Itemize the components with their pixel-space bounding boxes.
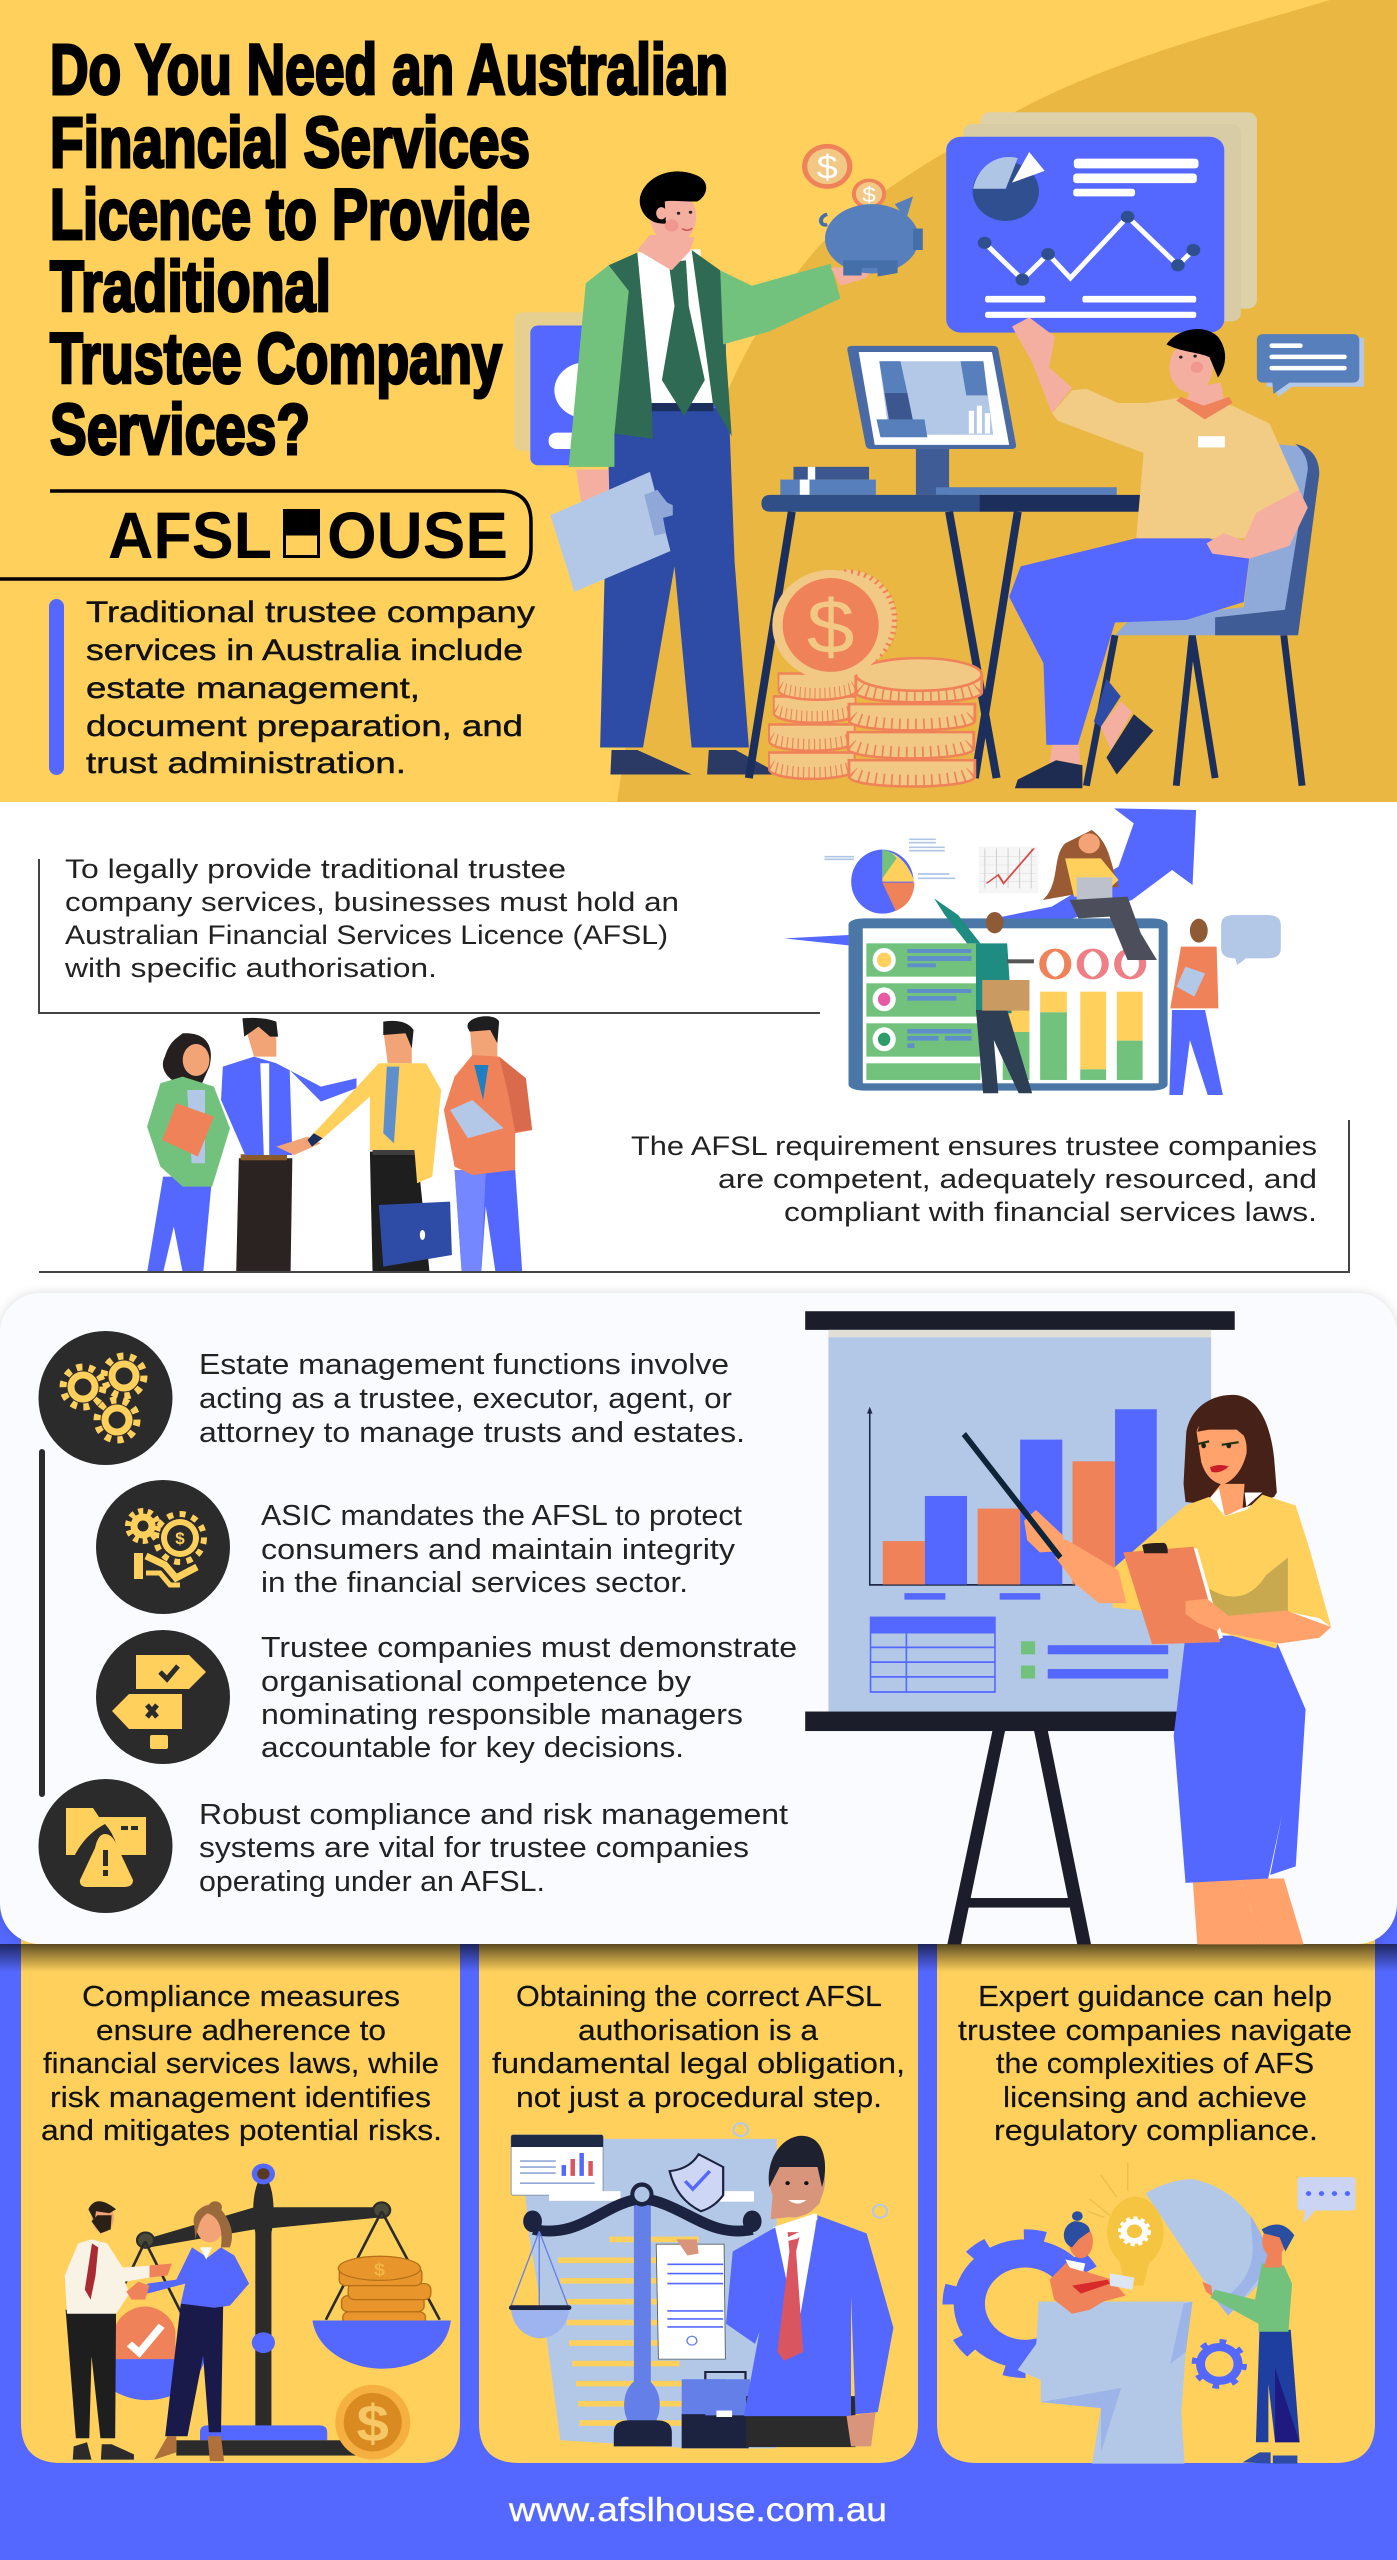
title: Traditional — [50, 248, 331, 327]
text block: licence requirement: company services, businesses must hold an — [65, 887, 679, 917]
panel: compliance measures card — [21, 1900, 460, 2463]
illustration: balance scale with businesspeople — [65, 2163, 451, 2461]
illustration: man with beard — [65, 2201, 172, 2460]
text block: organisational competence: organisational competence by — [261, 1666, 692, 1698]
text block: organisational competence: accountable for key decisions. — [261, 1732, 684, 1764]
panel shadow on cards — [0, 1944, 1397, 1972]
icon: background profile card — [514, 312, 726, 465]
illustration: dashboard team — [784, 808, 1281, 1095]
title — [50, 31, 728, 470]
text block: compliance measures — [41, 1981, 442, 2147]
illustration: desk, monitor and books — [749, 346, 1141, 778]
panel: compliance cards — [21, 1900, 1375, 2464]
chart: blue dashboard panel — [946, 112, 1257, 333]
illustration: standing man — [550, 171, 878, 774]
table — [871, 1617, 995, 1692]
text block: risk management: systems are vital for trustee companies — [199, 1832, 749, 1864]
text block: AFSL requirement purpose: The AFSL requirement ensures trustee companies — [631, 1131, 1317, 1161]
logo: AFSL House: AFSL — [108, 498, 272, 572]
text block: ASIC mandate: in the financial services sector. — [261, 1567, 688, 1599]
title: Financial Services — [50, 104, 530, 183]
icon: small gear — [1194, 2341, 1244, 2386]
title: Licence to Provide — [50, 176, 530, 255]
title: Services? — [50, 391, 310, 470]
icon: coin stacks — [769, 570, 982, 786]
text block: compliance measures: ensure adherence to — [96, 2015, 386, 2047]
text block: compliance measures: risk management identifies — [50, 2082, 431, 2114]
illustration: woman on head — [1050, 2211, 1134, 2314]
text block: expert guidance: regulatory compliance. — [994, 2115, 1318, 2147]
text block: correct authorisation: fundamental legal obligation, — [492, 2048, 905, 2080]
text block: ASIC mandate: consumers and maintain integrity — [261, 1534, 736, 1566]
text block: expert guidance: trustee companies navigate — [958, 2015, 1352, 2047]
panel: hero — [0, 0, 1397, 802]
illustration: woman in blue blazer — [126, 2201, 249, 2461]
intro text: Traditional trustee company — [86, 596, 535, 629]
item: organisational competence — [96, 1630, 797, 1764]
text block: ASIC mandate: ASIC mandates the AFSL to protect — [261, 1500, 742, 1532]
illustration: head with ideas — [949, 2163, 1355, 2464]
icon: speech bubble — [1257, 334, 1364, 397]
logo: AFSL House: OUSE — [327, 498, 508, 572]
illustration: business team handshake — [147, 1016, 532, 1273]
footer: website: www.afslhouse.com.au — [508, 2491, 887, 2528]
illustration: businessman holding document — [726, 2123, 893, 2447]
icon: shield with check — [670, 2154, 723, 2211]
illustration: seated man and chair — [1009, 317, 1319, 788]
icon: briefcase — [682, 2372, 750, 2448]
illustration: presenter with chart board — [805, 1311, 1331, 1944]
intro text: trust administration. — [86, 747, 406, 780]
text block: licence requirement: with specific authorisation. — [64, 953, 437, 983]
illustration: balance scale with businesspeople: $ — [374, 2259, 386, 2279]
legend — [1021, 1641, 1168, 1679]
text block: correct authorisation — [492, 1981, 905, 2114]
text block: organisational competence — [261, 1632, 797, 1764]
item: ASIC mandate — [96, 1480, 742, 1614]
icon: gold dollar coin — [335, 2385, 410, 2460]
text block: risk management: operating under an AFSL. — [199, 1866, 545, 1898]
logo: AFSL House — [0, 491, 531, 579]
text block: ASIC mandate — [261, 1500, 742, 1599]
icon: folder with warning — [66, 1808, 146, 1887]
text block: AFSL requirement purpose — [39, 1120, 1349, 1272]
illustration: legal scale and document — [509, 2135, 777, 2448]
intro text: document preparation, and — [86, 710, 523, 743]
man in orange jacket — [444, 1016, 532, 1273]
text block: expert guidance: the complexities of AFS — [996, 2048, 1314, 2080]
illustration: presenting woman — [964, 1395, 1331, 1944]
man in yellow shirt — [276, 1021, 452, 1273]
bar chart — [867, 1407, 1157, 1600]
text block: correct authorisation: not just a procedural step. — [516, 2082, 882, 2114]
intro text: services in Australia include — [86, 634, 523, 667]
text block: licence requirement: To legally provide traditional trustee — [65, 854, 566, 884]
text block: organisational competence: nominating responsible managers — [261, 1699, 743, 1731]
text block: expert guidance: Expert guidance can help — [978, 1981, 1332, 2013]
text block: compliance measures: Compliance measures — [82, 1981, 400, 2013]
icon: gear and dollar in hand — [128, 1511, 204, 1585]
text block: AFSL requirement purpose: are competent, adequately resourced, and — [718, 1164, 1317, 1194]
panel: expert guidance card — [937, 1900, 1375, 2464]
item: estate management — [38, 1331, 745, 1465]
chart: report window — [511, 2135, 603, 2195]
text block: licence requirement: Australian Financial Services Licence (AFSL) — [65, 920, 668, 950]
icon: piggy bank and coins: $ — [817, 148, 838, 186]
text block: risk management — [199, 1799, 788, 1898]
text block: risk management: Robust compliance and risk management — [199, 1799, 788, 1831]
text block: compliance measures: and mitigates potential risks. — [41, 2115, 442, 2147]
panel: key compliance points — [0, 1293, 1397, 1944]
text block: correct authorisation: Obtaining the correct AFSL — [516, 1981, 882, 2013]
icon: large gear — [949, 2235, 1101, 2372]
text block: estate management: acting as a trustee, executor, agent, or — [199, 1383, 732, 1415]
icon: piggy bank and coins: $ — [862, 182, 876, 207]
text block: licence requirement — [39, 854, 820, 1013]
man in blue suit — [221, 1018, 357, 1273]
woman — [147, 1033, 230, 1273]
text block: expert guidance: licensing and achieve — [1003, 2082, 1307, 2114]
projector screen stand — [805, 1311, 1235, 1944]
intro accent bar — [49, 599, 64, 775]
illustration: seated woman with laptop — [1043, 830, 1157, 960]
icon: speech bubble — [1221, 915, 1281, 965]
icon: chat bubble — [1297, 2177, 1355, 2223]
text block: correct authorisation: authorisation is a — [578, 2015, 819, 2047]
text block: estate management — [199, 1349, 745, 1449]
text block: expert guidance — [958, 1981, 1352, 2147]
icon: signpost — [112, 1655, 206, 1749]
intro text — [86, 596, 535, 780]
text block: estate management: attorney to manage trusts and estates. — [199, 1417, 745, 1449]
icon: three gears — [63, 1356, 144, 1440]
illustration: man in orange — [1169, 919, 1223, 1095]
icon: piggy bank and coins — [802, 144, 923, 277]
illustration: signed document — [656, 2239, 725, 2359]
intro text: estate management, — [86, 672, 420, 705]
panel: correct authorisation card — [479, 1900, 918, 2463]
illustration: pointing man — [934, 898, 1034, 1093]
icon: gold dollar coin: $ — [357, 2394, 389, 2452]
text block: organisational competence: Trustee companies must demonstrate — [261, 1632, 797, 1664]
text block: estate management: Estate management functions involve — [199, 1349, 729, 1381]
title: Trustee Company — [50, 320, 502, 399]
footer background band — [0, 1880, 1397, 2560]
timeline rail — [39, 1449, 45, 1797]
illustration: man lifting brain — [1202, 2225, 1300, 2464]
item: risk management — [38, 1779, 788, 1913]
text block: AFSL requirement purpose: compliant with financial services laws. — [784, 1197, 1317, 1227]
title: Do You Need an Australian — [50, 31, 728, 110]
illustration: hero scene — [514, 112, 1364, 788]
text block: compliance measures: financial services laws, while — [43, 2048, 439, 2080]
icon: coin stacks: $ — [807, 584, 855, 670]
icon: gear and dollar in hand: $ — [175, 1529, 185, 1548]
panel: licence requirement — [39, 808, 1349, 1273]
